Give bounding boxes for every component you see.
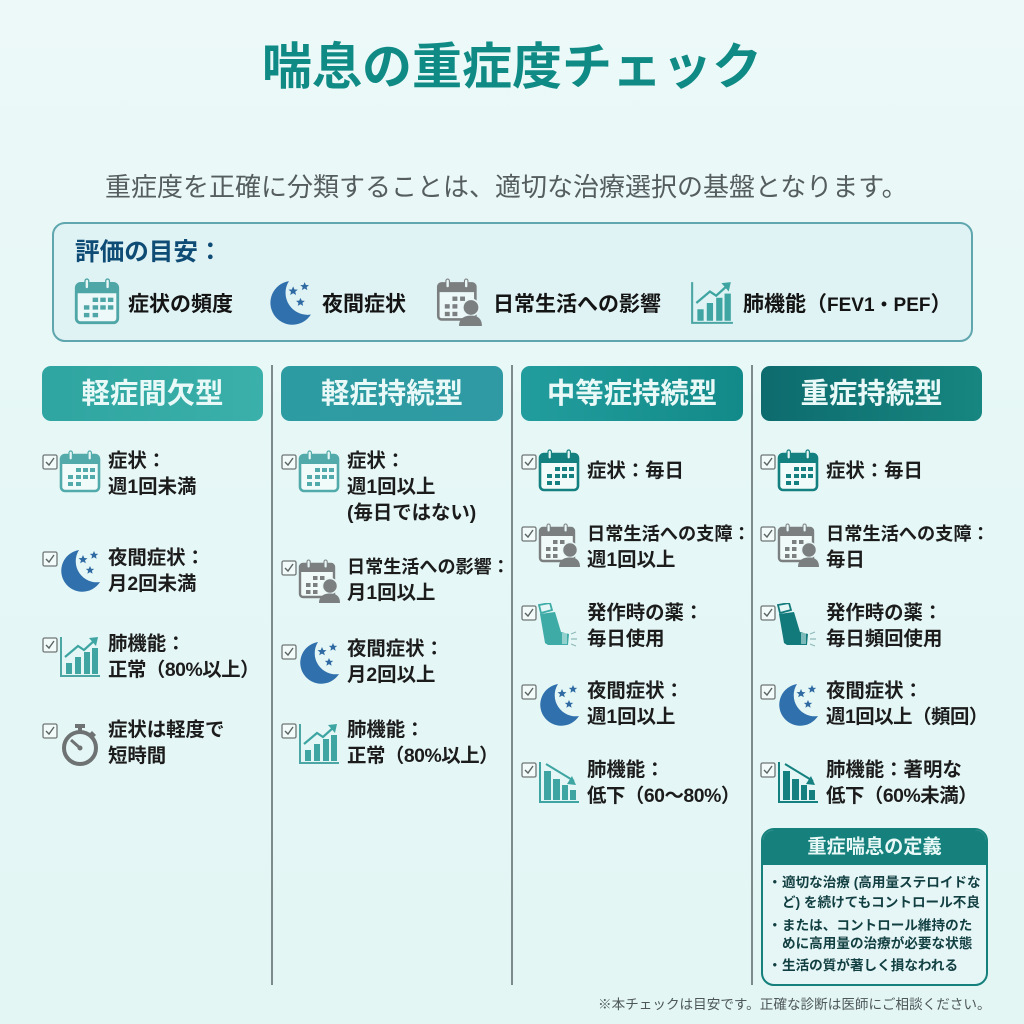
callout bullet 3: ・ bbox=[768, 958, 782, 973]
column header: mild intermittent bbox=[42, 366, 263, 421]
callout bullet 2: ・ bbox=[768, 918, 782, 933]
callout heading: 重症喘息の定義 bbox=[807, 837, 942, 858]
text: 日常生活への影響： bbox=[347, 557, 510, 577]
icon: falling chart bbox=[777, 761, 819, 805]
heading: evaluation criteria: 評価の目安： bbox=[75, 239, 223, 266]
callout text 2 bbox=[782, 917, 972, 953]
icon: calendar with person bbox=[777, 523, 819, 567]
text: 月2回未満 bbox=[108, 573, 196, 595]
text bbox=[108, 450, 196, 498]
column: severe persistent bbox=[760, 440, 988, 810]
column header: mild persistent bbox=[281, 366, 503, 421]
panel: evaluation criteria bbox=[52, 222, 973, 342]
text: 夜間症状： bbox=[587, 680, 684, 702]
column: moderate persistent bbox=[521, 440, 749, 810]
label: daily life impact: 日常生活への影響 bbox=[493, 293, 661, 316]
callout text 1: ど) を続けてもコントロール不良 bbox=[782, 895, 980, 910]
icon: calendar with person bbox=[436, 278, 482, 326]
icon: rising chart bbox=[691, 282, 733, 324]
column header: moderate persistent bbox=[521, 366, 743, 421]
icon: stopwatch bbox=[62, 724, 98, 766]
callout: definition of severe asthma bbox=[761, 828, 988, 986]
text: 正常（80%以上） bbox=[108, 659, 259, 681]
column header: severe persistent: 重症持続型 bbox=[801, 378, 942, 410]
checkbox bbox=[760, 684, 776, 700]
item: symptoms bbox=[521, 449, 749, 493]
text: 症状は軽度で bbox=[108, 719, 224, 741]
item: symptoms bbox=[281, 450, 476, 524]
text: 夜間症状： bbox=[108, 547, 205, 569]
item: short mild symptoms bbox=[42, 719, 224, 767]
text: 毎日頻回使用 bbox=[826, 628, 942, 650]
callout bullet 1: ・ bbox=[768, 875, 782, 890]
subtitle: 重症度を正確に分類することは、適切な治療選択の基盤となります。 bbox=[105, 172, 908, 202]
item: symptoms bbox=[760, 449, 988, 493]
text: 週1回以上 bbox=[587, 549, 675, 571]
text: 週1回以上 bbox=[587, 706, 675, 728]
text bbox=[587, 678, 684, 730]
text: 低下（60～80%） bbox=[587, 785, 740, 807]
item: lung function bbox=[521, 761, 749, 805]
checkbox bbox=[42, 723, 58, 739]
criterion: night symptoms bbox=[270, 281, 406, 325]
text bbox=[108, 547, 205, 595]
item: lung function bbox=[281, 719, 498, 767]
text: 低下（60%未満） bbox=[826, 785, 977, 807]
item: night symptoms bbox=[281, 638, 444, 686]
callout text 2: めに高用量の治療が必要な状態 bbox=[782, 936, 972, 951]
checkbox bbox=[42, 637, 58, 653]
text: 夜間症状： bbox=[826, 680, 923, 702]
text: 発作時の薬： bbox=[826, 602, 942, 624]
checkbox bbox=[521, 526, 537, 542]
column header: moderate persistent: 中等症持続型 bbox=[547, 378, 717, 410]
checkbox bbox=[760, 526, 776, 542]
text: 毎日 bbox=[826, 549, 865, 571]
item: daily life impact bbox=[281, 557, 510, 604]
item: symptoms bbox=[42, 450, 196, 498]
icon: moon bbox=[300, 642, 339, 684]
icon: inhaler bbox=[777, 603, 819, 647]
icon: calendar bbox=[298, 450, 340, 492]
text: 症状：毎日 bbox=[826, 460, 923, 482]
item: daily life impact bbox=[760, 523, 988, 567]
text: 週1回未満 bbox=[108, 476, 196, 498]
column: mild persistent bbox=[281, 450, 510, 767]
icon: calendar bbox=[60, 450, 100, 492]
text: 症状： bbox=[108, 450, 166, 472]
icon: falling chart bbox=[538, 761, 580, 805]
label: symptom frequency: 症状の頻度 bbox=[128, 293, 233, 316]
text bbox=[826, 757, 977, 809]
item: daily life impact bbox=[521, 523, 749, 567]
title: 喘息の重症度チェック bbox=[262, 39, 762, 95]
checkbox bbox=[281, 454, 297, 470]
item: night symptoms bbox=[42, 547, 205, 595]
text bbox=[826, 521, 990, 573]
text: 肺機能：著明な bbox=[826, 759, 962, 781]
item: lung function bbox=[760, 761, 988, 805]
checkbox bbox=[521, 762, 537, 778]
text: 肺機能： bbox=[587, 759, 665, 781]
icon: calendar bbox=[74, 278, 120, 324]
item: night symptoms bbox=[521, 682, 749, 726]
icon: inhaler bbox=[538, 603, 580, 647]
text: 発作時の薬： bbox=[587, 602, 703, 624]
checkbox bbox=[521, 684, 537, 700]
label: lung function: 肺機能（FEV1・PEF） bbox=[743, 293, 951, 316]
icon: calendar with person bbox=[298, 560, 340, 603]
checkbox bbox=[42, 551, 58, 567]
checkbox bbox=[281, 560, 297, 576]
text bbox=[587, 521, 751, 573]
item: lung function bbox=[42, 633, 259, 681]
callout text 3: 生活の質が著しく損なわれる bbox=[782, 958, 958, 973]
text bbox=[347, 638, 444, 686]
column: mild intermittent bbox=[42, 450, 259, 767]
footnote: ※本チェックは目安です。正確な診断は医師にご相談ください。 bbox=[598, 997, 991, 1012]
checkbox bbox=[281, 644, 297, 660]
checkbox bbox=[42, 454, 58, 470]
callout text 2: または、コントロール維持のた bbox=[782, 918, 972, 933]
text bbox=[826, 600, 942, 652]
criterion: symptom frequency bbox=[74, 278, 233, 324]
column header: severe persistent bbox=[761, 366, 982, 421]
text: (毎日ではない) bbox=[347, 502, 476, 524]
text bbox=[108, 719, 224, 767]
criterion: lung function bbox=[691, 282, 951, 324]
checkbox bbox=[521, 454, 537, 470]
callout heading bbox=[763, 830, 986, 865]
item: rescue medication bbox=[760, 603, 988, 647]
text: 日常生活への支障： bbox=[587, 524, 751, 544]
checkbox bbox=[760, 454, 776, 470]
text bbox=[587, 600, 703, 652]
text: 日常生活への支障： bbox=[826, 524, 990, 544]
text: 週1回以上 bbox=[347, 476, 435, 498]
text: 月1回以上 bbox=[347, 582, 435, 604]
text bbox=[347, 557, 510, 604]
criterion: daily life impact bbox=[436, 278, 661, 326]
icon: calendar bbox=[777, 449, 819, 493]
text: 短時間 bbox=[108, 745, 166, 767]
icon: moon bbox=[61, 550, 100, 592]
text: 肺機能： bbox=[347, 719, 425, 741]
text bbox=[587, 757, 740, 809]
text: 毎日使用 bbox=[587, 628, 665, 650]
text: 月2回以上 bbox=[347, 664, 435, 686]
text: 夜間症状： bbox=[347, 638, 444, 660]
text: 正常（80%以上） bbox=[347, 745, 498, 767]
item: night symptoms bbox=[760, 682, 988, 726]
text bbox=[108, 633, 259, 681]
text: 症状： bbox=[347, 450, 405, 472]
text bbox=[347, 450, 476, 524]
checkbox bbox=[760, 762, 776, 778]
text: 肺機能： bbox=[108, 633, 186, 655]
text: 週1回以上（頻回） bbox=[826, 706, 988, 728]
label: night symptoms: 夜間症状 bbox=[322, 293, 406, 316]
text bbox=[826, 678, 988, 730]
column header: mild persistent: 軽症持続型 bbox=[321, 378, 463, 410]
icon: moon bbox=[777, 682, 819, 726]
column header: mild intermittent: 軽症間欠型 bbox=[82, 378, 223, 410]
checkbox bbox=[281, 723, 297, 739]
checkbox bbox=[760, 605, 776, 621]
checkbox bbox=[521, 605, 537, 621]
callout text 1: 適切な治療 (高用量ステロイドな bbox=[782, 875, 981, 890]
icon: rising chart bbox=[298, 722, 340, 766]
icon: calendar bbox=[538, 449, 580, 493]
item: rescue medication bbox=[521, 603, 749, 647]
icon: rising chart bbox=[60, 637, 100, 677]
icon: moon bbox=[270, 281, 311, 325]
text bbox=[347, 717, 498, 769]
callout text 1 bbox=[782, 873, 981, 913]
icon: calendar with person bbox=[538, 523, 580, 567]
icon: moon bbox=[538, 682, 580, 726]
text: 症状：毎日 bbox=[587, 460, 684, 482]
